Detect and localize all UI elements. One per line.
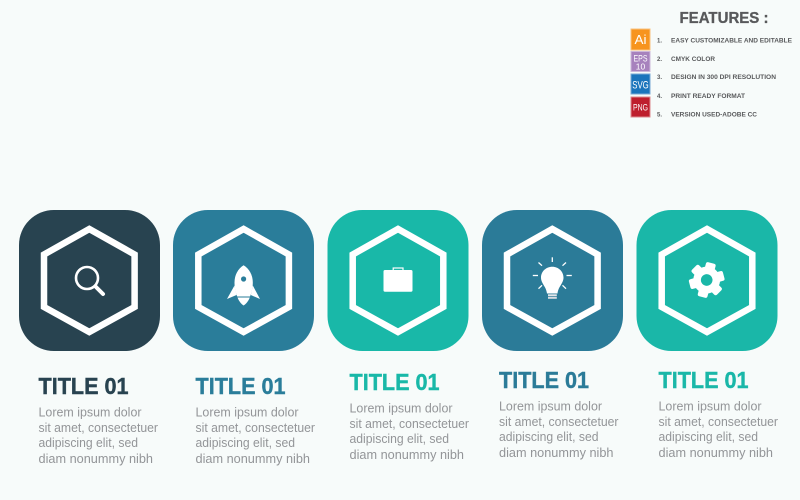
feature list: 2. xyxy=(657,57,662,63)
feature list: DESIGN IN 300 DPI RESOLUTION xyxy=(671,75,776,81)
hexagon frame xyxy=(662,229,752,332)
icon: EPS badge: EPS xyxy=(634,54,648,64)
feature list xyxy=(657,38,792,118)
text block: column 1: adipiscing elit, sed xyxy=(38,435,138,450)
icon: PNG badge xyxy=(631,97,650,117)
text block: column 2: TITLE 01 xyxy=(196,373,286,399)
text block: column 2 xyxy=(196,373,316,466)
text block: column 5: diam nonummy nibh xyxy=(658,445,773,460)
text block: column 4: Lorem ipsum dolor xyxy=(499,398,603,414)
hexagon frame xyxy=(507,229,598,332)
icon: rocket xyxy=(227,265,260,306)
feature list: 1. xyxy=(657,38,662,44)
panel: card 3 briefcase xyxy=(328,210,468,351)
text block: column 3: adipiscing elit, sed xyxy=(350,431,449,446)
text block: column 4 xyxy=(499,367,619,460)
text block: column 3 xyxy=(350,369,470,462)
icon: Ai badge: Ai xyxy=(634,32,647,47)
icon: EPS badge: 10 xyxy=(636,62,645,72)
text block: column 1: diam nonummy nibh xyxy=(38,451,153,466)
icon: PNG badge: PNG xyxy=(633,102,648,112)
text block: column 5: sit amet, consectetuer xyxy=(658,414,779,429)
icon: SVG badge: SVG xyxy=(632,80,649,92)
text block: column 4: sit amet, consectetuer xyxy=(499,414,619,429)
text block: column 5: TITLE 01 xyxy=(658,367,749,393)
text block: column 5: Lorem ipsum dolor xyxy=(658,398,762,414)
text block: column 4: diam nonummy nibh xyxy=(499,445,614,460)
text block: column 3: diam nonummy nibh xyxy=(350,447,464,462)
hexagon frame xyxy=(198,229,289,332)
panel: card 4 light bulb xyxy=(482,210,623,351)
text block: column 2: Lorem ipsum dolor xyxy=(196,404,299,420)
feature list: PRINT READY FORMAT xyxy=(671,94,745,100)
hexagon frame xyxy=(353,229,443,332)
text block: column 1: sit amet, consectetuer xyxy=(38,420,159,435)
panel: features xyxy=(631,10,792,118)
text block: column 2: adipiscing elit, sed xyxy=(196,435,295,450)
icon: gear xyxy=(685,258,728,302)
text block: column 2: diam nonummy nibh xyxy=(196,451,310,466)
icon: SVG badge xyxy=(631,74,650,94)
panel: card 2 rocket xyxy=(173,210,314,351)
icon: Ai badge xyxy=(631,29,650,50)
text block: column 5 xyxy=(658,367,779,460)
text block: column 1: Lorem ipsum dolor xyxy=(38,404,142,420)
text block: column 1: TITLE 01 xyxy=(38,373,129,399)
text block: column 4: adipiscing elit, sed xyxy=(499,429,598,444)
icon: magnifying glass xyxy=(76,267,103,294)
icon: briefcase xyxy=(384,268,412,292)
text block: column 1 xyxy=(38,373,159,466)
text block: column 2: sit amet, consectetuer xyxy=(196,420,316,435)
feature list: VERSION USED-ADOBE CC xyxy=(671,112,758,118)
panel: card 1 search xyxy=(19,210,160,351)
text block: column 3: Lorem ipsum dolor xyxy=(350,400,453,416)
feature list: 4. xyxy=(657,94,662,100)
feature list: 3. xyxy=(657,75,662,81)
text block: column 4: TITLE 01 xyxy=(499,367,589,393)
feature list: CMYK COLOR xyxy=(671,57,716,63)
icon: light bulb xyxy=(533,257,572,299)
hexagon frame xyxy=(44,229,135,332)
text block: column 3: TITLE 01 xyxy=(350,369,440,395)
icon: EPS badge xyxy=(631,52,650,72)
feature list: EASY CUSTOMIZABLE AND EDITABLE xyxy=(671,38,792,44)
text block: column 3: sit amet, consectetuer xyxy=(350,416,470,431)
feature list: 5. xyxy=(657,112,662,118)
panel: card 5 gear xyxy=(636,210,778,351)
text block: column 5: adipiscing elit, sed xyxy=(658,429,758,444)
heading: features: FEATURES : xyxy=(680,10,768,27)
